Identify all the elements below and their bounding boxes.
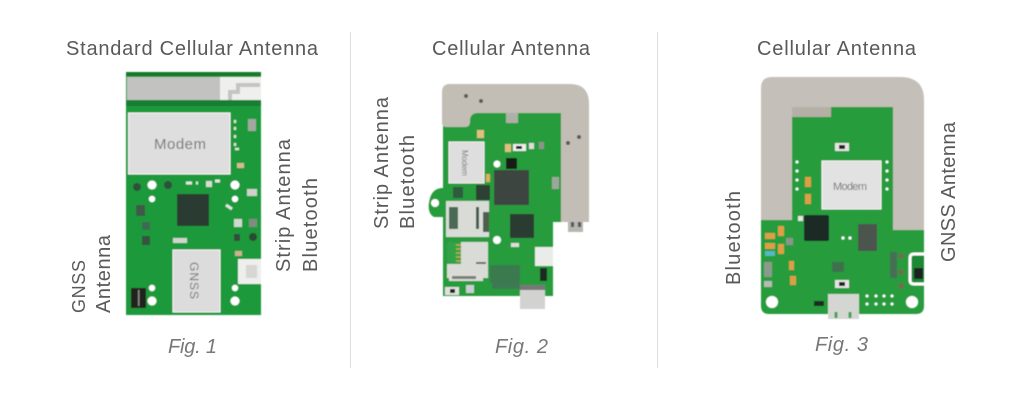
circuit board 2 [429,84,589,309]
USB connector [828,294,859,319]
connector [238,259,261,284]
caption: fig 2: Fig. 2 [495,336,548,358]
label: strip antenna and bluetooth [371,96,419,229]
antenna frame [761,77,924,230]
secondary chip [510,214,534,238]
label: strip antenna and bluetooth: Strip Antenna [371,96,393,229]
edge cutout [910,254,924,284]
heading: cellular antenna: Cellular Antenna [432,38,591,60]
secondary chip [858,224,877,251]
panel: figure 1 [66,38,322,358]
white connector [535,247,553,266]
label: GNSS Antenna [69,234,115,313]
panel: figure 3 [723,38,960,356]
panel: figure 2 [371,38,591,358]
antenna frame [442,84,589,222]
modem chip: Modem [833,181,867,193]
antenna connector [568,222,583,232]
GNSS chip: GNSS [187,262,201,299]
label: strip antenna and bluetooth [273,138,322,272]
label: strip antenna and bluetooth: Bluetooth [397,135,419,229]
small components [445,130,559,295]
USB connector [520,285,545,309]
label: GNSS antenna: GNSS Antenna [938,121,960,262]
GNSS chip [173,250,220,312]
modem chip [822,161,881,209]
strip antenna [127,77,261,100]
modem chip [449,142,484,183]
caption: fig 3: Fig. 3 [815,334,868,356]
mounting holes [148,180,240,306]
main processor [494,170,529,205]
label: strip antenna and bluetooth: Bluetooth [300,178,322,272]
modem chip: Modem [460,150,469,176]
caption: fig 1: Fig. 1 [168,336,217,358]
circuit board 3 [761,77,924,319]
SIM slots [446,201,489,281]
label: strip antenna and bluetooth: Strip Antenna [273,138,295,272]
modem chip: Modem [154,136,206,153]
label: GNSS Antenna: Antenna [93,234,115,313]
label: GNSS Antenna: GNSS [69,260,89,313]
small components [764,143,904,306]
circuit board 1 [126,72,261,315]
main processor [177,194,209,226]
heading: cellular antenna: Cellular Antenna [757,38,917,60]
main processor [804,215,829,241]
heading: standard cellular antenna: Standard Cellular Antenna [66,38,319,60]
mounting holes [766,160,918,308]
small components [131,119,257,308]
label: bluetooth: Bluetooth [723,191,745,285]
modem chip [128,113,230,174]
